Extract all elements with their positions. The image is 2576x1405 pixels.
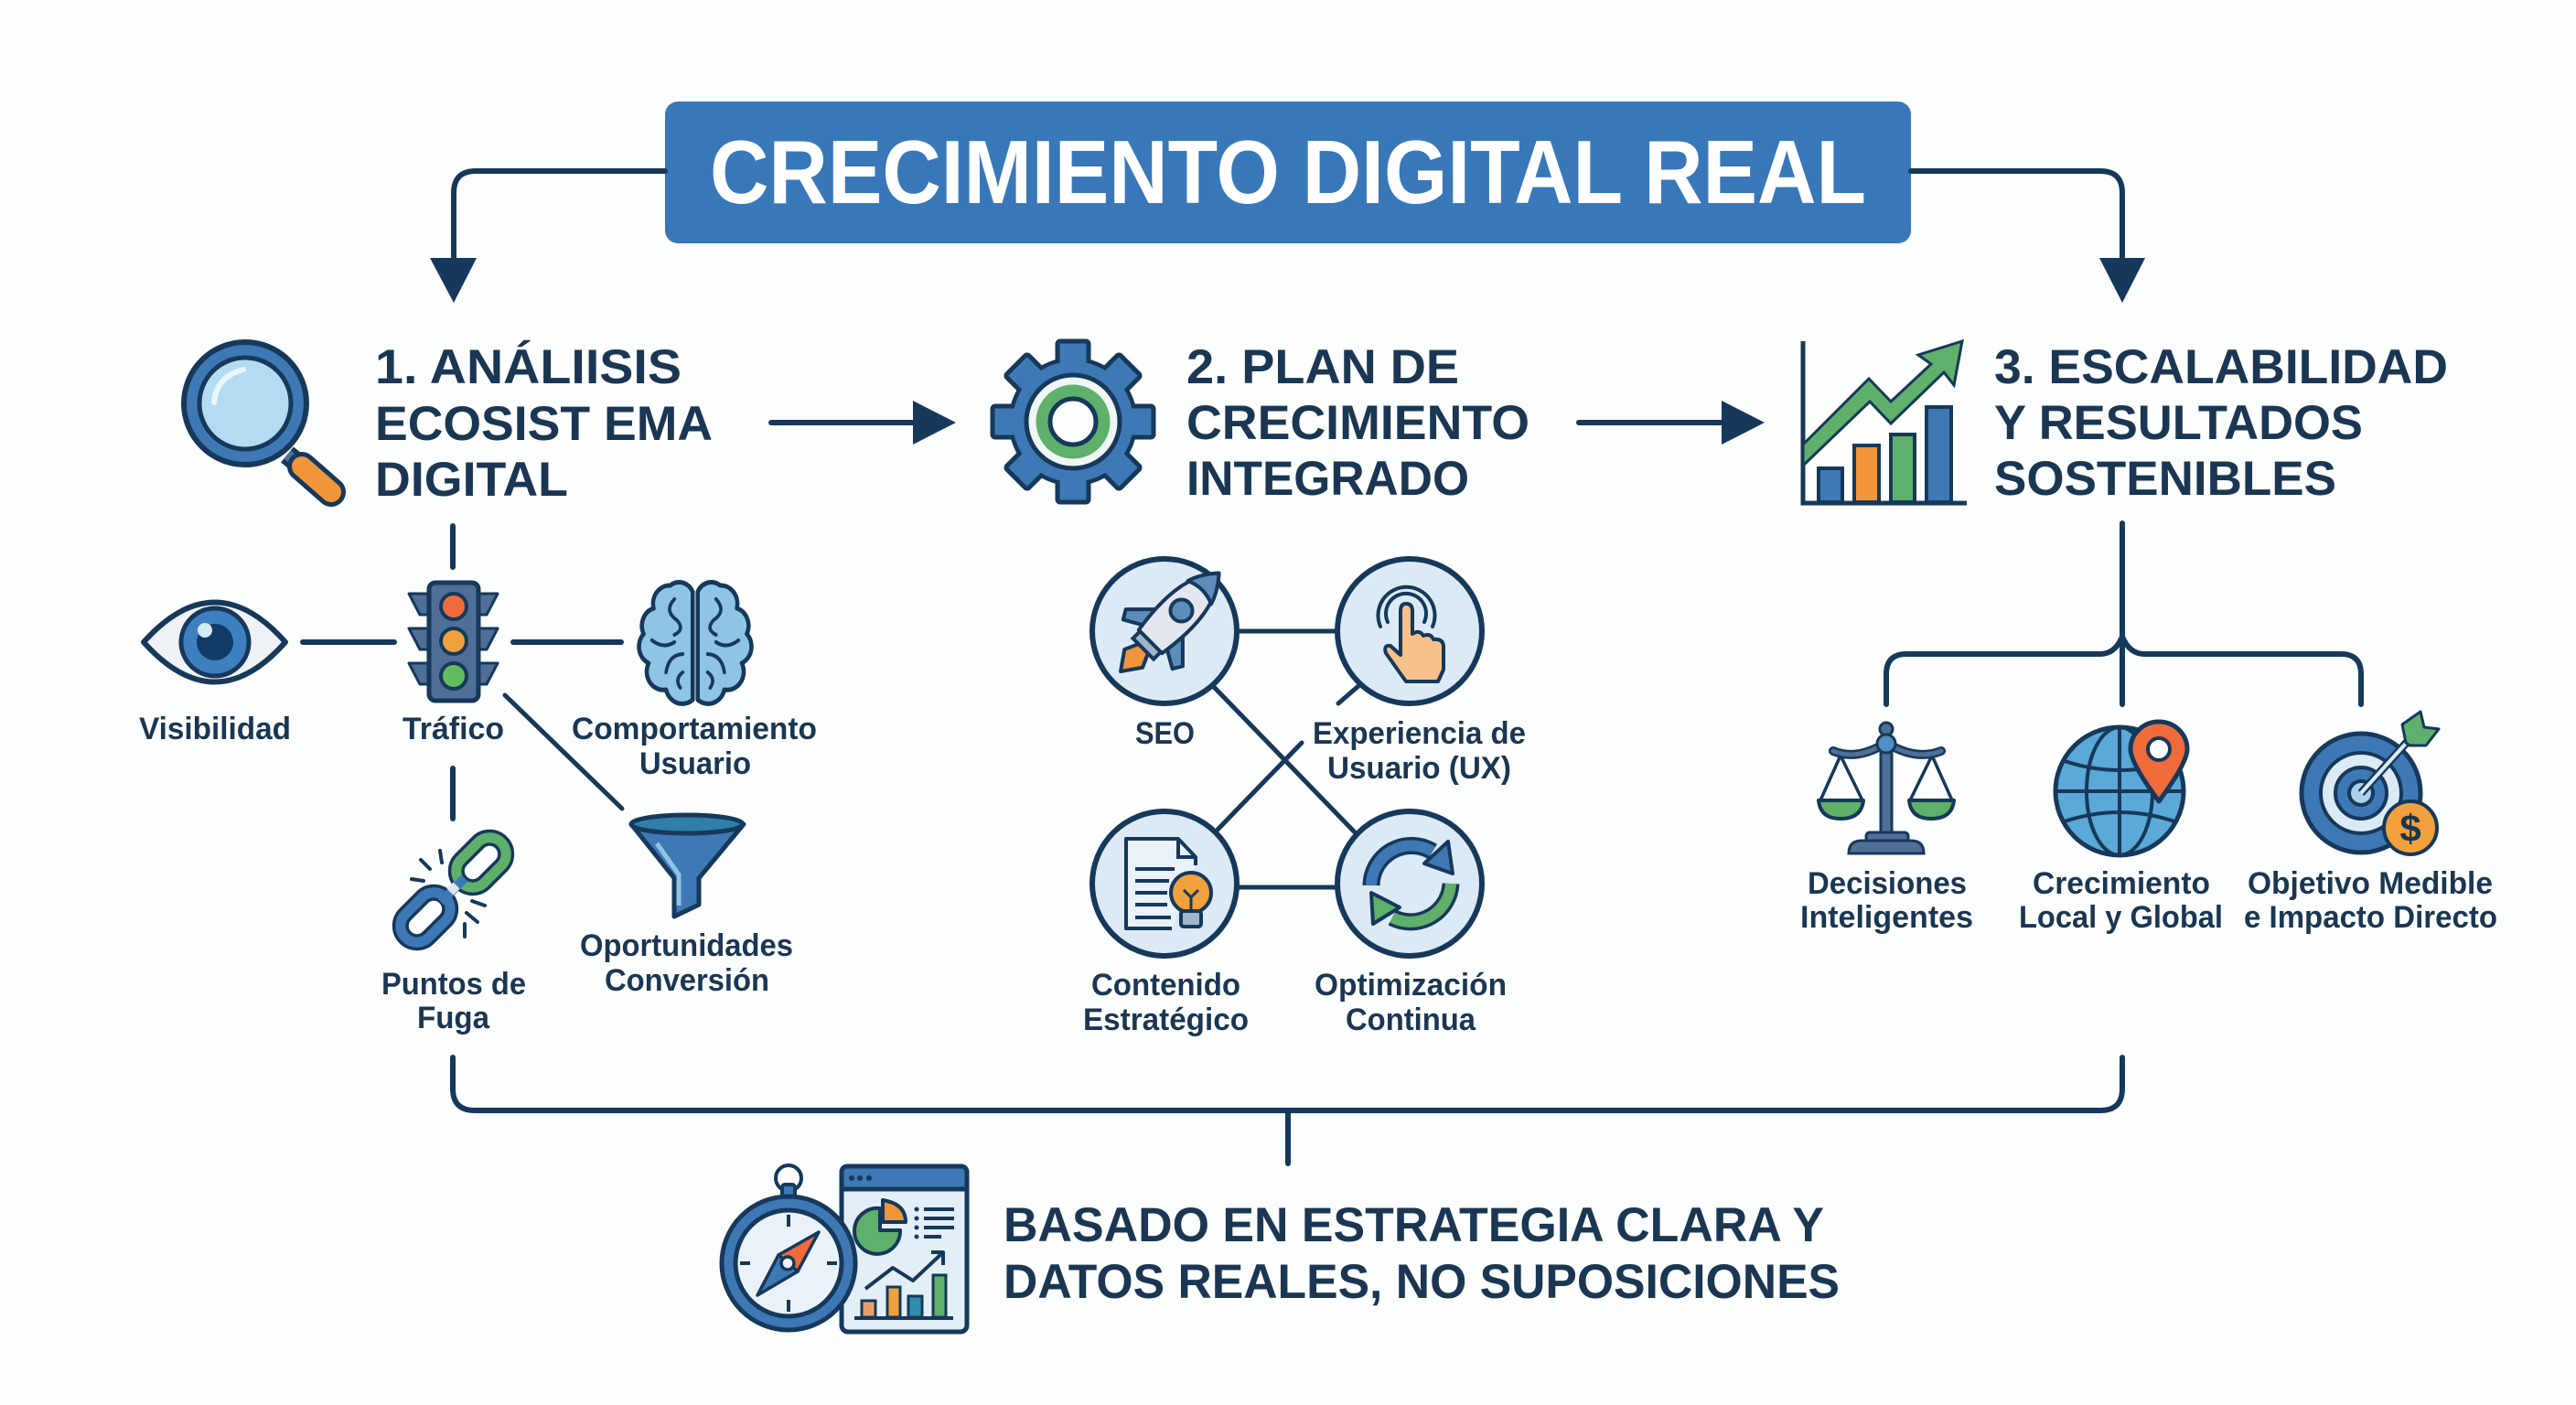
label: Crecimiento Local y Global: Crecimiento bbox=[2033, 866, 2210, 901]
heading: step 3: SOSTENIBLES bbox=[1994, 452, 2336, 506]
heading: step 2: INTEGRADO bbox=[1186, 452, 1469, 506]
icon: compass bbox=[722, 1165, 855, 1330]
label: Experiencia de Usuario (UX): Usuario (UX) bbox=[1327, 751, 1511, 786]
arrow: step 2 to step 3 bbox=[1579, 401, 1765, 445]
arrow: title to step 1 bbox=[430, 171, 665, 303]
label: Oportunidades Conversión bbox=[580, 928, 793, 998]
label: Comportamiento Usuario: Comportamiento bbox=[572, 712, 817, 746]
icon: target with coin bbox=[2302, 712, 2439, 854]
label: Oportunidades Conversión: Conversión bbox=[605, 963, 769, 998]
heading: step 1 bbox=[375, 339, 713, 507]
label: Objetivo Medible e Impacto Directo: e Impacto Directo bbox=[2244, 900, 2497, 935]
icon: gear bbox=[993, 341, 1154, 502]
label: Comportamiento Usuario: Usuario bbox=[639, 746, 751, 781]
icon: dashboard panel bbox=[842, 1166, 967, 1332]
label: Objetivo Medible e Impacto Directo bbox=[2244, 866, 2497, 935]
icon: traffic light bbox=[409, 583, 498, 701]
icon: refresh circle (optimization) bbox=[1337, 811, 1482, 956]
connectors: step 1 network bbox=[303, 526, 622, 819]
label: Crecimiento Local y Global bbox=[2019, 866, 2223, 935]
label: Experiencia de Usuario (UX): Experiencia de bbox=[1313, 716, 1526, 751]
icon: brain bbox=[639, 583, 751, 703]
icon: rocket circle (SEO) bbox=[1092, 544, 1248, 703]
label: Tráfico: Tráfico bbox=[402, 712, 504, 746]
label: Puntos de Fuga bbox=[381, 967, 526, 1035]
icon: broken chain bbox=[393, 831, 513, 949]
arrow: title to step 3 bbox=[1911, 171, 2145, 303]
connectors: step 3 tree bbox=[1886, 523, 2361, 704]
connectors: step 2 network bbox=[1214, 631, 1358, 887]
label: Contenido Estratégico: Estratégico bbox=[1083, 1003, 1249, 1037]
label: Decisiones Inteligentes: Decisiones bbox=[1808, 866, 1967, 901]
label: Contenido Estratégico: Contenido bbox=[1091, 968, 1240, 1003]
label: Comportamiento Usuario bbox=[572, 712, 817, 781]
label: Optimización Continua: Continua bbox=[1346, 1003, 1476, 1037]
heading: step 1: DIGITAL bbox=[375, 453, 568, 507]
label: Optimización Continua: Optimización bbox=[1315, 968, 1507, 1003]
label: SEO: SEO bbox=[1135, 716, 1195, 751]
label: Objetivo Medible e Impacto Directo: Objetivo Medible bbox=[2248, 866, 2493, 901]
bottom statement: BASADO EN ESTRATEGIA CLARA Y bbox=[1004, 1198, 1824, 1252]
heading: step 3 bbox=[1994, 340, 2448, 506]
bottom bracket connector bbox=[453, 1057, 2122, 1164]
label: Oportunidades Conversión: Oportunidades bbox=[580, 928, 793, 963]
bottom statement: DATOS REALES, NO SUPOSICIONES bbox=[1004, 1255, 1840, 1309]
label: Visibilidad: Visibilidad bbox=[139, 712, 291, 746]
label: Decisiones Inteligentes: Inteligentes bbox=[1800, 900, 1973, 935]
heading: step 3: Y RESULTADOS bbox=[1994, 396, 2363, 450]
label: Experiencia de Usuario (UX) bbox=[1313, 716, 1526, 786]
label: Crecimiento Local y Global: Local y Global bbox=[2019, 900, 2223, 935]
heading: step 2 bbox=[1186, 340, 1530, 506]
label: Contenido Estratégico bbox=[1083, 968, 1249, 1037]
heading: step 1: 1. ANÁLIISIS bbox=[375, 339, 682, 394]
bottom statement bbox=[1004, 1198, 1840, 1309]
icon: funnel bbox=[631, 815, 744, 917]
title banner bbox=[665, 102, 1911, 243]
label: Optimización Continua bbox=[1315, 968, 1507, 1037]
heading: step 1: ECOSIST EMA bbox=[375, 397, 713, 451]
icon: balance scale bbox=[1819, 723, 1954, 853]
label: Puntos de Fuga: Fuga bbox=[417, 1001, 490, 1035]
icon: target with coin: $ bbox=[2399, 807, 2421, 850]
heading: step 2: 2. PLAN DE bbox=[1186, 340, 1459, 394]
icon: growth chart bbox=[1803, 341, 1967, 503]
label: Decisiones Inteligentes bbox=[1800, 866, 1973, 935]
heading: step 3: 3. ESCALABILIDAD bbox=[1994, 340, 2448, 394]
icon: eye bbox=[144, 602, 285, 682]
icon: touch circle (UX) bbox=[1337, 559, 1482, 703]
icon: document circle (content) bbox=[1092, 811, 1237, 956]
icon: globe with pin bbox=[2055, 722, 2187, 855]
arrow: step 1 to step 2 bbox=[771, 401, 956, 445]
label: Puntos de Fuga: Puntos de bbox=[381, 967, 526, 1002]
heading: step 2: CRECIMIENTO bbox=[1186, 396, 1530, 450]
title banner: CRECIMIENTO DIGITAL REAL bbox=[710, 122, 1866, 222]
icon: magnifying glass bbox=[184, 342, 331, 492]
